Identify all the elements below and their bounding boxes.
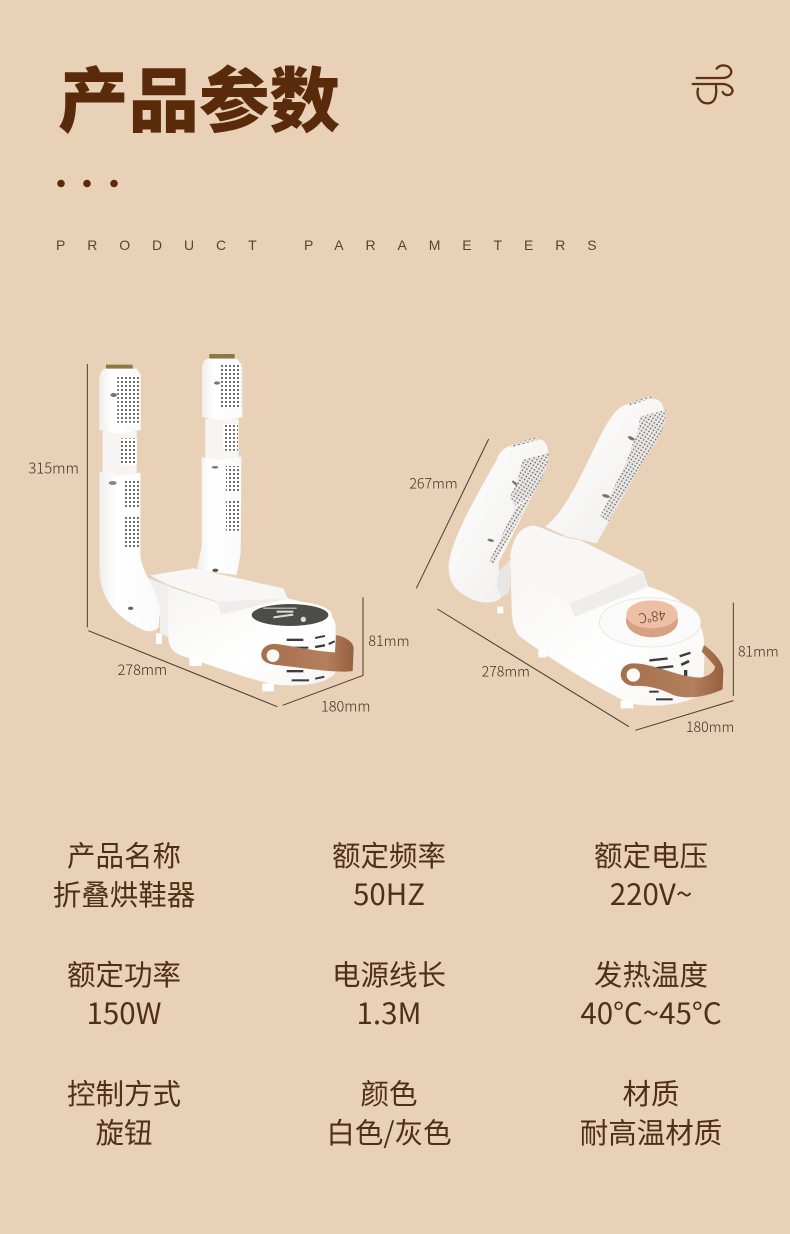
- base top plate: [150, 568, 288, 614]
- spec: rated frequency: [332, 834, 446, 914]
- base body: [510, 560, 704, 706]
- spec: rated voltage: 额定电压: [594, 834, 708, 875]
- spec: colour: 颜色: [360, 1072, 418, 1113]
- label: 315mm: [28, 457, 79, 478]
- left product: unfolded dryer: [28, 354, 410, 717]
- spec: control method: [67, 1072, 181, 1152]
- label: 180mm: [321, 696, 370, 717]
- spec: rated frequency: 额定频率: [332, 834, 446, 875]
- front arm: [449, 437, 549, 602]
- knob readout: 48°C: [637, 606, 667, 629]
- spec: rated power: [67, 953, 181, 1033]
- spec: product name: 产品名称: [67, 834, 181, 875]
- temperature knob: [626, 600, 678, 637]
- base body: [168, 587, 336, 685]
- spec: material: [580, 1072, 722, 1152]
- subtitle: PRODUCT PARAMETERS: [56, 237, 618, 253]
- right product: folded dryer: [409, 395, 779, 737]
- spec: heating temperature: 发热温度: [594, 953, 708, 994]
- vents: [287, 635, 335, 681]
- spec: material: 耐高温材质: [580, 1111, 722, 1152]
- spec: cord length: 1.3M: [357, 991, 421, 1033]
- leather strap: [621, 645, 723, 697]
- leather strap: [261, 635, 354, 672]
- label: 81mm: [738, 641, 779, 661]
- left arm: [99, 365, 160, 631]
- spec: product name: 折叠烘鞋器: [53, 873, 195, 914]
- base rear feet: [156, 633, 162, 644]
- spec: heating temperature: 40°C~45°C: [580, 991, 722, 1033]
- spec: cord length: [332, 953, 446, 1033]
- base plate back: [143, 576, 171, 638]
- feet: [497, 607, 633, 708]
- control dial base: [599, 598, 701, 647]
- spec: rated power: 150W: [86, 991, 162, 1033]
- spec: rated power: 额定功率: [67, 953, 181, 994]
- feet: [189, 658, 274, 691]
- spec: product name: [53, 834, 195, 914]
- label: 278mm: [482, 662, 530, 682]
- vents: [649, 652, 691, 700]
- title: 产品参数: [58, 45, 340, 147]
- right arm: [197, 354, 242, 575]
- spec: colour: 白色/灰色: [326, 1111, 452, 1152]
- control dial: [249, 601, 332, 631]
- spec: material: 材质: [622, 1072, 680, 1113]
- spec: cord length: 电源线长: [332, 953, 446, 994]
- label: 81mm: [368, 630, 410, 651]
- spec: rated frequency: 50HZ: [353, 872, 425, 914]
- spec: colour: [326, 1072, 452, 1152]
- label: 278mm: [118, 659, 167, 680]
- spec: control method: 控制方式: [67, 1072, 181, 1113]
- spec: rated voltage: 220V~: [610, 872, 692, 914]
- rear arm: [545, 395, 666, 543]
- spec: control method: 旋钮: [95, 1111, 152, 1152]
- spec: heating temperature: [580, 953, 722, 1033]
- dimension lines: [87, 364, 363, 707]
- label: 267mm: [409, 473, 458, 493]
- dimension lines: [416, 439, 733, 730]
- base top plate: [510, 526, 648, 617]
- decorative dots: [57, 180, 118, 188]
- spec: rated voltage: [594, 834, 708, 914]
- label: 180mm: [686, 717, 734, 737]
- icon: wind: [692, 64, 734, 104]
